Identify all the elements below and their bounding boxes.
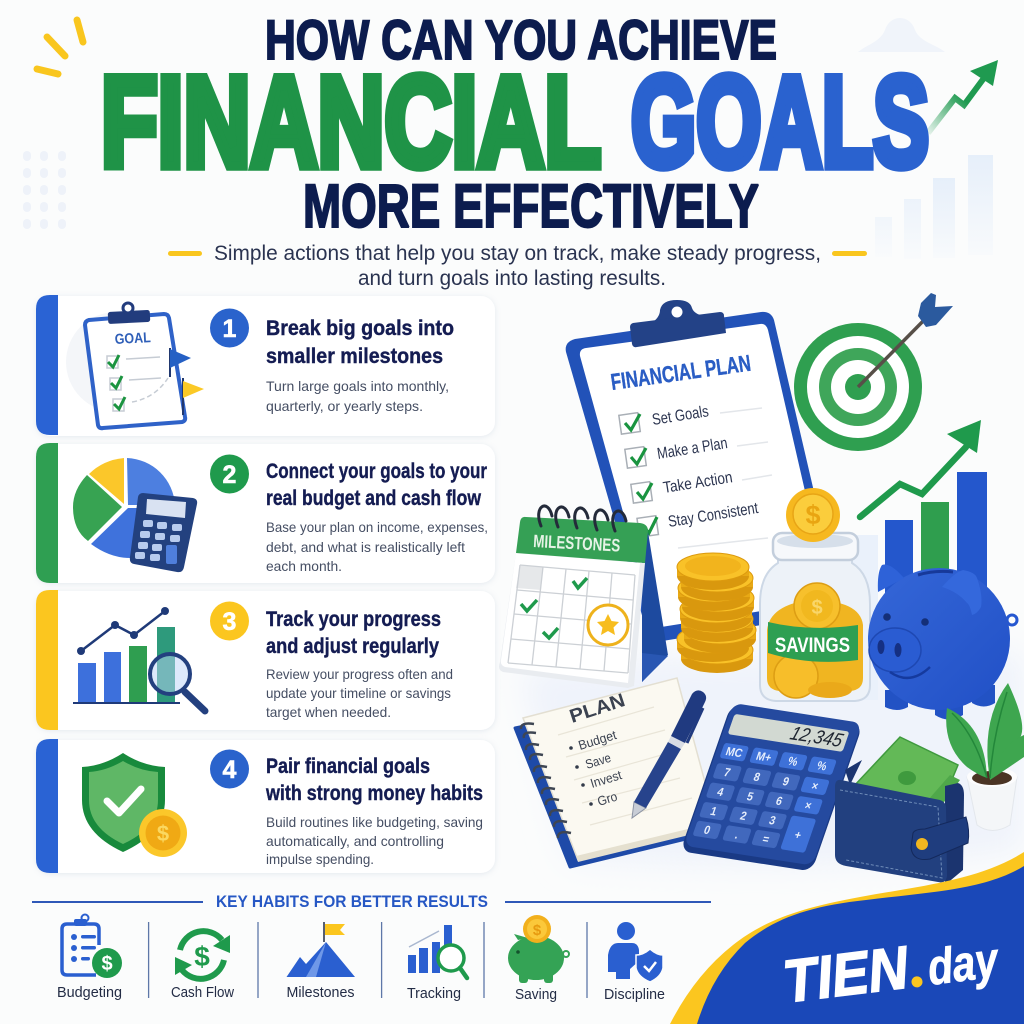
step number 2 xyxy=(210,454,249,494)
illustration: calculator: 12,345 xyxy=(787,722,847,751)
background decoration: cloud xyxy=(858,18,945,52)
icon: calculator xyxy=(130,493,197,572)
step 2 description: Base your plan on income, expenses, xyxy=(266,519,488,535)
panel: step 4 xyxy=(36,739,495,873)
habit: discipline: Discipline xyxy=(604,987,665,1003)
illustration: pen xyxy=(632,690,706,818)
panel: step 2 xyxy=(36,443,495,583)
step 3 description: Review your progress often and xyxy=(266,666,453,682)
illustration: plant xyxy=(946,683,1024,830)
step 2 heading: Connect your goals to your xyxy=(266,460,487,483)
step 1 description xyxy=(266,378,449,414)
panel: step 3 xyxy=(36,590,495,730)
step 1 description: Turn large goals into monthly, xyxy=(266,378,449,394)
step 3 heading xyxy=(266,608,441,658)
habit: tracking: Tracking xyxy=(407,986,461,1002)
step number 4 xyxy=(210,750,249,788)
illustration: savings jar xyxy=(760,533,878,701)
illustration: calculator: 6 xyxy=(774,795,784,808)
habit: cash flow xyxy=(171,931,234,1001)
step 4 heading: with strong money habits xyxy=(265,782,483,805)
step 4 heading: Pair financial goals xyxy=(266,755,430,778)
illustration: calculator: % xyxy=(815,760,828,773)
step number 1: 1 xyxy=(223,315,237,343)
step 3 description xyxy=(266,666,453,720)
decoration: yellow sparkle xyxy=(37,20,83,74)
illustration: notebook: Save xyxy=(583,750,613,772)
illustration: calculator: 3 xyxy=(767,815,777,828)
illustration: notebook xyxy=(515,678,718,867)
subtitle xyxy=(168,242,867,290)
icon: coin: $ xyxy=(157,821,169,846)
habit: tracking xyxy=(407,925,467,1002)
subtitle: and turn goals into lasting results. xyxy=(358,267,666,290)
habit: milestones xyxy=(286,922,355,1001)
illustration: financial plan clipboard: Take Action xyxy=(662,469,734,497)
illustration: calculator: . xyxy=(733,829,740,842)
illustration: milestones calendar xyxy=(499,506,668,688)
illustration: notebook: Gro xyxy=(595,789,619,809)
title xyxy=(101,8,929,240)
step 2 heading xyxy=(266,460,487,510)
step 1 heading: Break big goals into xyxy=(266,317,454,340)
step number 4: 4 xyxy=(223,756,237,784)
title: FINANCIAL xyxy=(101,51,601,194)
habit: cash flow: Cash Flow xyxy=(171,985,234,1001)
step 1 description: quarterly, or yearly steps. xyxy=(266,398,423,414)
footer: brand swoosh xyxy=(670,852,1024,1024)
illustration: calculator: = xyxy=(761,833,771,847)
illustration: financial plan clipboard: Set Goals xyxy=(651,403,710,429)
illustration: falling coin xyxy=(786,488,840,542)
habit: saving xyxy=(508,915,569,1003)
illustration: calculator: 8 xyxy=(752,771,762,784)
illustration: wallet with cash xyxy=(835,737,969,885)
step 4 description: automatically, and controlling xyxy=(266,833,444,849)
background: scene tint xyxy=(520,650,1024,867)
step 3 description: update your timeline or savings xyxy=(266,685,451,701)
divider: key habits heading: KEY HABITS FOR BETTER RESULTS xyxy=(216,892,488,911)
title: HOW CAN YOU ACHIEVE xyxy=(265,8,777,71)
illustration: calculator: × xyxy=(803,800,813,813)
illustration: calculator: 0 xyxy=(702,824,712,837)
habit: budgeting xyxy=(57,914,122,1001)
step 4 heading xyxy=(265,755,483,805)
step 4 description: impulse spending. xyxy=(266,851,374,867)
step 3 heading: and adjust regularly xyxy=(266,635,439,658)
icon: rising arrow top right xyxy=(928,60,998,133)
step 2 description: debt, and what is realistically left xyxy=(266,539,465,555)
illustration: calculator xyxy=(680,703,863,872)
icon: coin xyxy=(139,809,187,857)
title: MORE EFFECTIVELY xyxy=(303,172,759,240)
habit: budgeting: $ xyxy=(101,953,113,975)
illustration: calculator: × xyxy=(810,780,820,793)
illustration: financial plan clipboard: Make a Plan xyxy=(656,435,729,463)
illustration: target with arrow xyxy=(794,293,953,451)
habit: milestones: Milestones xyxy=(286,985,354,1001)
background decoration: faint bars xyxy=(875,155,993,259)
icon: shield xyxy=(82,753,165,852)
illustration: financial plan clipboard: FINANCIAL PLAN xyxy=(609,350,752,395)
habit: discipline xyxy=(604,922,665,1003)
step 3 heading: Track your progress xyxy=(266,608,441,631)
step number 2: 2 xyxy=(223,461,236,489)
habit: cash flow: $ xyxy=(194,941,210,972)
illustration: growth bars xyxy=(885,472,987,602)
step 2 description xyxy=(266,519,488,574)
step 2 heading: real budget and cash flow xyxy=(266,487,482,510)
step number 1 xyxy=(210,308,249,348)
illustration: financial plan clipboard xyxy=(566,300,842,643)
step 3 description: target when needed. xyxy=(266,704,391,720)
illustration: calculator: 2 xyxy=(738,810,748,823)
illustration: milestones calendar: MILESTONES xyxy=(533,531,621,556)
icon: goal clipboard: GOAL xyxy=(114,330,151,348)
habit: budgeting: Budgeting xyxy=(57,985,122,1001)
illustration: savings jar: SAVINGS xyxy=(775,634,850,657)
panel: step 1 xyxy=(36,295,495,436)
illustration: calculator: % xyxy=(786,755,799,769)
step 2 description: each month. xyxy=(266,558,342,574)
icon: goal clipboard xyxy=(85,303,204,428)
habit: saving: Saving xyxy=(515,987,557,1003)
illustration: piggy bank xyxy=(868,565,1017,720)
illustration: financial plan clipboard: Stay Consistent xyxy=(667,500,760,531)
step 4 description xyxy=(266,814,483,867)
subtitle: Simple actions that help you stay on track, make steady progress, xyxy=(214,242,821,265)
brand name: TIEN xyxy=(779,933,913,1015)
illustration: notebook: Budget xyxy=(576,727,619,753)
illustration: calculator: 1 xyxy=(708,806,718,819)
illustration: notebook: Invest xyxy=(588,767,624,791)
illustration: calculator: 5 xyxy=(745,791,755,804)
illustration: savings jar: $ xyxy=(811,597,823,619)
key habits separators xyxy=(149,922,587,998)
illustration: calculator: MC xyxy=(724,746,744,760)
step number 3: 3 xyxy=(223,608,236,636)
step 1 heading xyxy=(266,317,454,368)
step 4 description: Build routines like budgeting, saving xyxy=(266,814,483,830)
brand name: day xyxy=(924,931,1003,996)
illustration: calculator: 7 xyxy=(722,767,732,780)
brand name xyxy=(779,922,1003,1015)
step 1 heading: smaller milestones xyxy=(266,345,443,368)
icon: chart and magnifier xyxy=(73,607,205,711)
illustration: coin stack xyxy=(677,553,756,673)
step number 3 xyxy=(210,602,249,640)
illustration: growth arrow xyxy=(860,420,981,517)
habit: saving: $ xyxy=(533,922,542,939)
background decoration: dots xyxy=(23,151,66,229)
illustration: notebook: PLAN xyxy=(567,690,628,728)
illustration: calculator: + xyxy=(793,829,803,842)
illustration: falling coin: $ xyxy=(805,500,821,530)
illustration: calculator: 4 xyxy=(715,786,726,799)
icon: pie chart xyxy=(73,458,175,558)
illustration: calculator: 9 xyxy=(781,776,791,789)
illustration: calculator: M+ xyxy=(754,750,773,765)
